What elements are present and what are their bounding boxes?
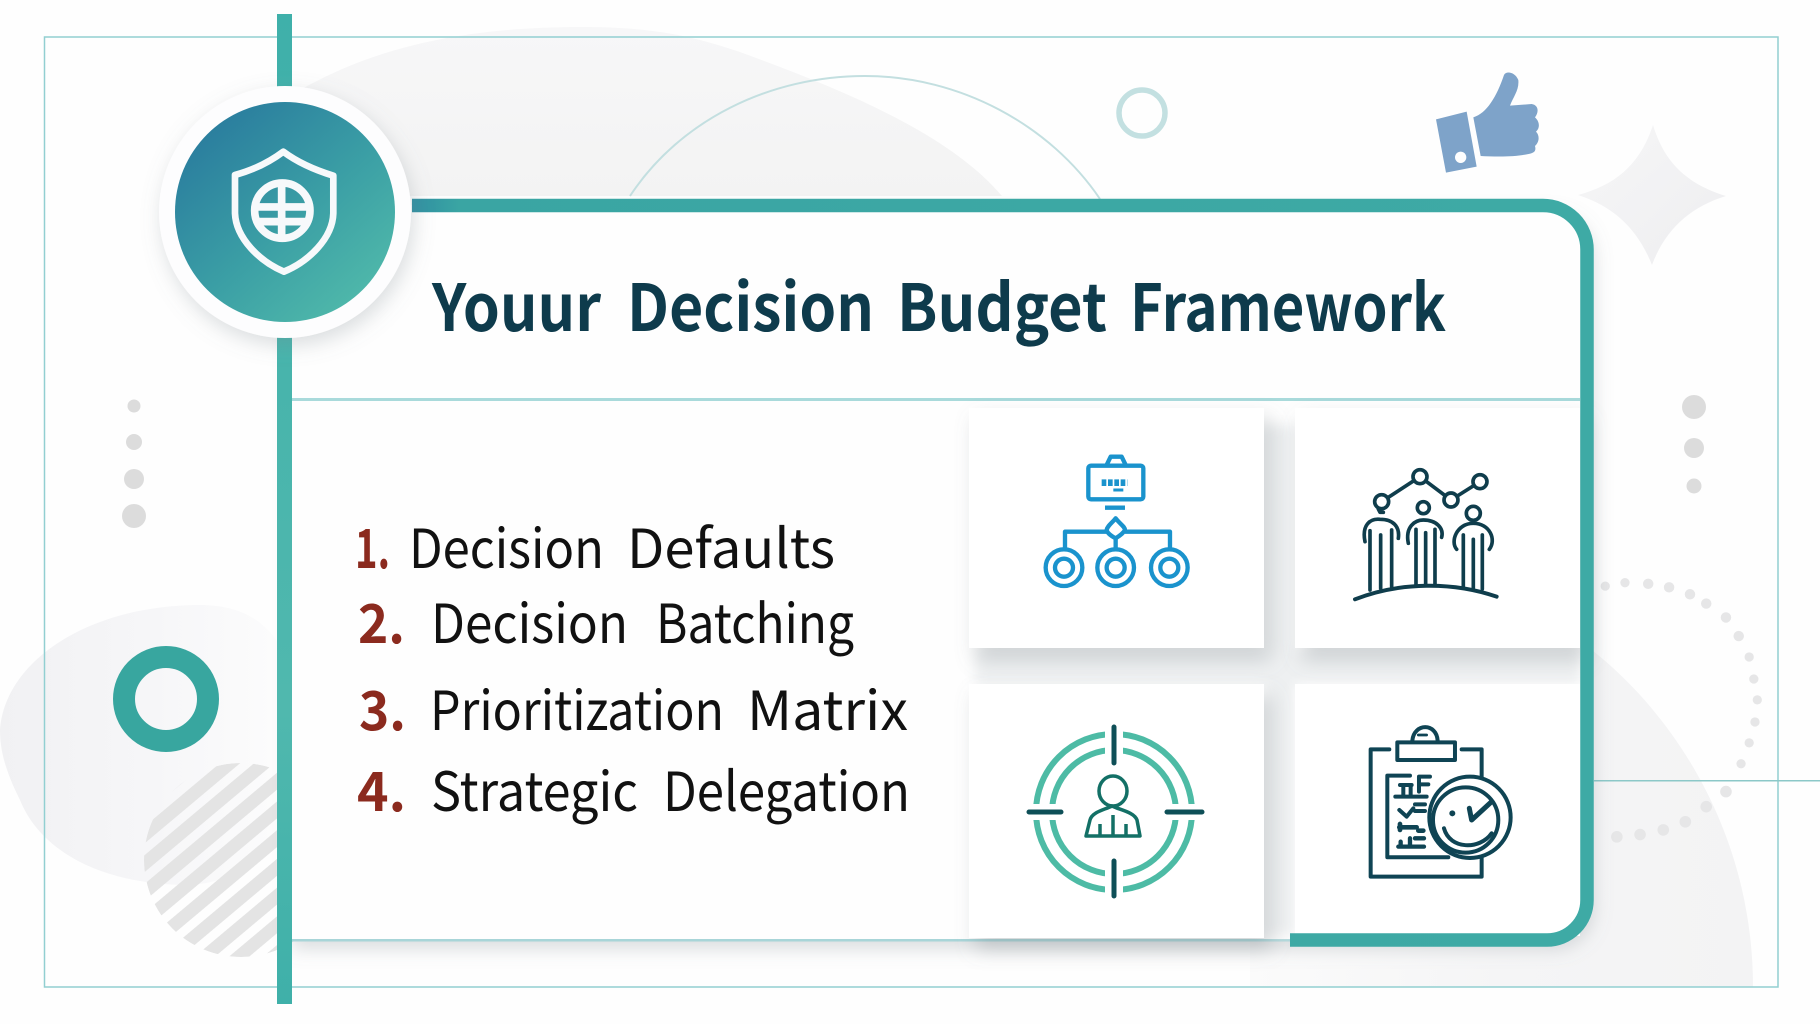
decorative dotted arc: right bbox=[1601, 578, 1762, 843]
badge: white circle bbox=[159, 86, 411, 338]
list item 3: Matrix bbox=[747, 667, 908, 746]
title: Decision bbox=[627, 256, 874, 350]
hatched circle bbox=[144, 763, 293, 957]
icon: thumbs up bbox=[1436, 72, 1539, 173]
card 2 bbox=[1295, 408, 1580, 648]
list item 2: Decision bbox=[431, 580, 628, 659]
badge: gradient circle bbox=[175, 102, 395, 322]
vertical teal bar bbox=[277, 14, 292, 1004]
list item 3: Prioritization bbox=[430, 667, 724, 746]
teal ring bbox=[124, 657, 208, 741]
icon: org chart with briefcase bbox=[1046, 457, 1188, 586]
thin arc behind panel bbox=[630, 76, 1100, 199]
icon: clipboard with clock bbox=[1371, 727, 1511, 877]
list item 2: Batching bbox=[656, 580, 854, 659]
icon: people with trend line bbox=[1355, 470, 1497, 599]
title: Budget bbox=[897, 256, 1107, 350]
title: Youur bbox=[431, 256, 602, 350]
decorative dots: right bbox=[1682, 395, 1706, 494]
list item 4: Strategic bbox=[431, 748, 638, 827]
icon: shield with globe bbox=[235, 152, 333, 272]
card 4 bbox=[1295, 684, 1580, 936]
soft shadow bands between cards bbox=[975, 425, 1580, 935]
small ring bbox=[1119, 90, 1165, 136]
list item 4: 4. bbox=[357, 748, 406, 827]
thin line right of panel bbox=[1594, 780, 1820, 782]
panel background bbox=[285, 205, 1587, 940]
list item 3: 3. bbox=[359, 667, 406, 746]
panel teal border bbox=[412, 206, 1587, 940]
title: Framework bbox=[1130, 256, 1446, 350]
background blob: top bbox=[300, 27, 1002, 196]
list item 3 bbox=[359, 667, 908, 746]
header divider line bbox=[292, 398, 1580, 401]
background blob: left bbox=[0, 605, 300, 885]
background blob: bottom right bbox=[1250, 650, 1753, 987]
bottom thin line bbox=[292, 939, 1292, 942]
list item 1 bbox=[355, 505, 835, 584]
list item 2 bbox=[358, 580, 854, 659]
list item 1: Decision bbox=[409, 505, 604, 584]
list item 1: 1. bbox=[355, 505, 390, 584]
icon: target with person bbox=[1029, 726, 1202, 898]
decorative four-point star bbox=[1578, 125, 1726, 265]
title bbox=[431, 256, 1446, 350]
card 3 bbox=[969, 684, 1264, 938]
list item 4 bbox=[357, 748, 910, 827]
list item 1: Defaults bbox=[627, 505, 835, 584]
card 1 bbox=[969, 408, 1264, 648]
list item 4: Delegation bbox=[663, 748, 910, 827]
decorative dots: left bbox=[122, 400, 146, 528]
list item 2: 2. bbox=[358, 580, 405, 659]
